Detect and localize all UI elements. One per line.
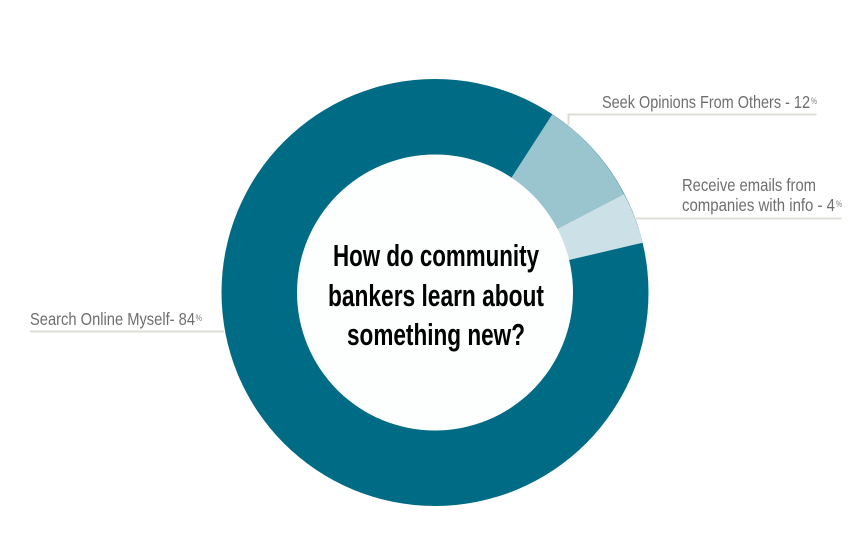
center title: bankers learn about [328,278,544,313]
callout: receive emails: Receive emails from [682,175,816,195]
segment: receive emails 4% [549,194,643,262]
center title: something new? [347,317,525,352]
callout: seek opinions [568,92,817,125]
callout: search online: Search Online Myself- 84 [30,309,195,329]
center title: How do community [333,238,540,273]
segment: seek opinions 12% [506,114,624,233]
callout: search online: % [196,313,202,323]
center circle [297,154,573,430]
callout: receive emails [636,175,842,218]
donut chart [222,79,648,506]
segment: search online 84% [222,79,648,506]
callout: seek opinions: Seek Opinions From Others - 12 [602,92,810,112]
callout: seek opinions: % [811,96,817,106]
center title [328,238,544,352]
callout: receive emails: % [836,199,842,209]
callout: receive emails: companies with info - 4 [682,195,835,215]
